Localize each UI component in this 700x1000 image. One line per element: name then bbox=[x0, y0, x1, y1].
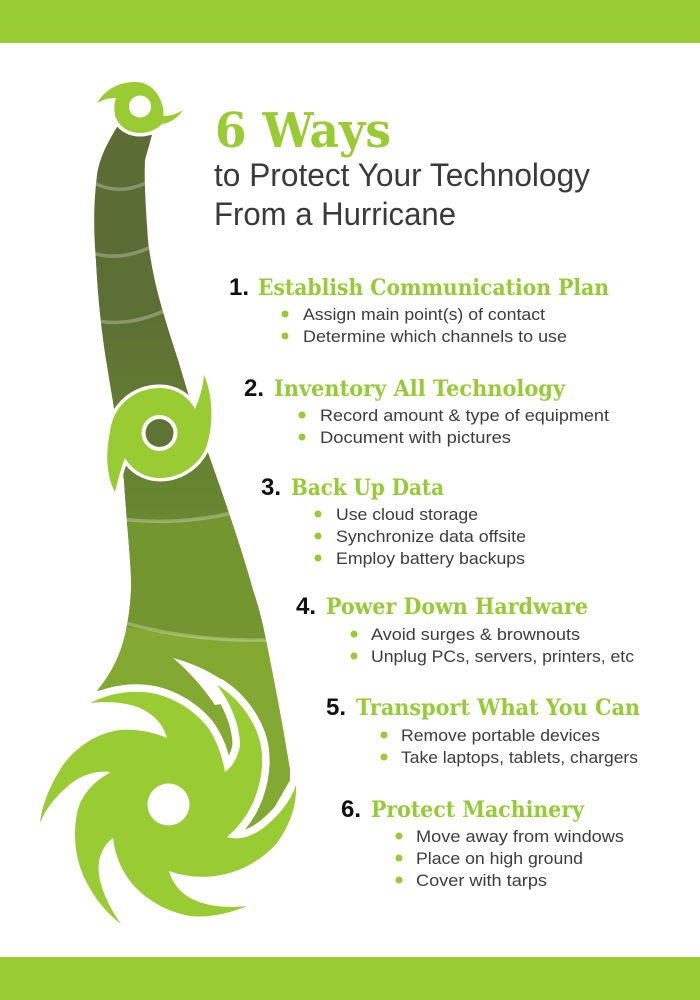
step 4 bbox=[296, 593, 635, 666]
step 6: Protect Machinery bbox=[371, 797, 585, 823]
step 2: Record amount & type of equipment bbox=[320, 406, 609, 425]
hurricane tower illustration bbox=[40, 82, 310, 924]
step 1: Assign main point(s) of contact bbox=[303, 305, 545, 324]
step 6: Cover with tarps bbox=[416, 871, 547, 890]
top small hurricane bbox=[97, 82, 183, 133]
step 6: 6. bbox=[341, 796, 361, 823]
step 3: Back Up Data bbox=[291, 475, 444, 501]
step 2: 2. bbox=[244, 375, 264, 402]
title: to Protect Your Technology bbox=[214, 157, 590, 193]
step 3: Use cloud storage bbox=[336, 505, 478, 524]
step 5 bbox=[326, 694, 640, 767]
step 6: Place on high ground bbox=[416, 849, 583, 868]
step 6 bbox=[341, 796, 624, 890]
step 5: 5. bbox=[326, 694, 346, 721]
step 5: Remove portable devices bbox=[401, 726, 600, 745]
step 3: 3. bbox=[261, 474, 281, 501]
title bbox=[214, 103, 590, 232]
step 5: Take laptops, tablets, chargers bbox=[401, 748, 638, 767]
step 1: 1. bbox=[229, 274, 249, 301]
step 2: Inventory All Technology bbox=[274, 376, 566, 402]
title: From a Hurricane bbox=[214, 196, 456, 232]
step 4: Unplug PCs, servers, printers, etc bbox=[371, 647, 635, 666]
step 1: Determine which channels to use bbox=[303, 327, 567, 346]
step 4: 4. bbox=[296, 593, 316, 620]
top bar bbox=[0, 0, 700, 43]
step 3: Synchronize data offsite bbox=[336, 527, 526, 546]
step 1: Establish Communication Plan bbox=[258, 275, 609, 301]
bottom bar bbox=[0, 957, 700, 1000]
step 1 bbox=[229, 274, 609, 346]
step 4: Power Down Hardware bbox=[326, 594, 588, 620]
white swirl sliver bbox=[173, 658, 245, 705]
step 6: Move away from windows bbox=[416, 827, 624, 846]
step 3 bbox=[261, 474, 526, 568]
large hurricane bbox=[40, 685, 296, 924]
step 3: Employ battery backups bbox=[336, 549, 525, 568]
middle hurricane bbox=[107, 375, 211, 492]
step 2: Document with pictures bbox=[320, 428, 511, 447]
step 5: Transport What You Can bbox=[356, 695, 640, 721]
step 2 bbox=[244, 375, 609, 447]
tower body bbox=[94, 127, 290, 830]
step 4: Avoid surges & brownouts bbox=[371, 625, 580, 644]
title: 6 Ways bbox=[215, 103, 391, 159]
